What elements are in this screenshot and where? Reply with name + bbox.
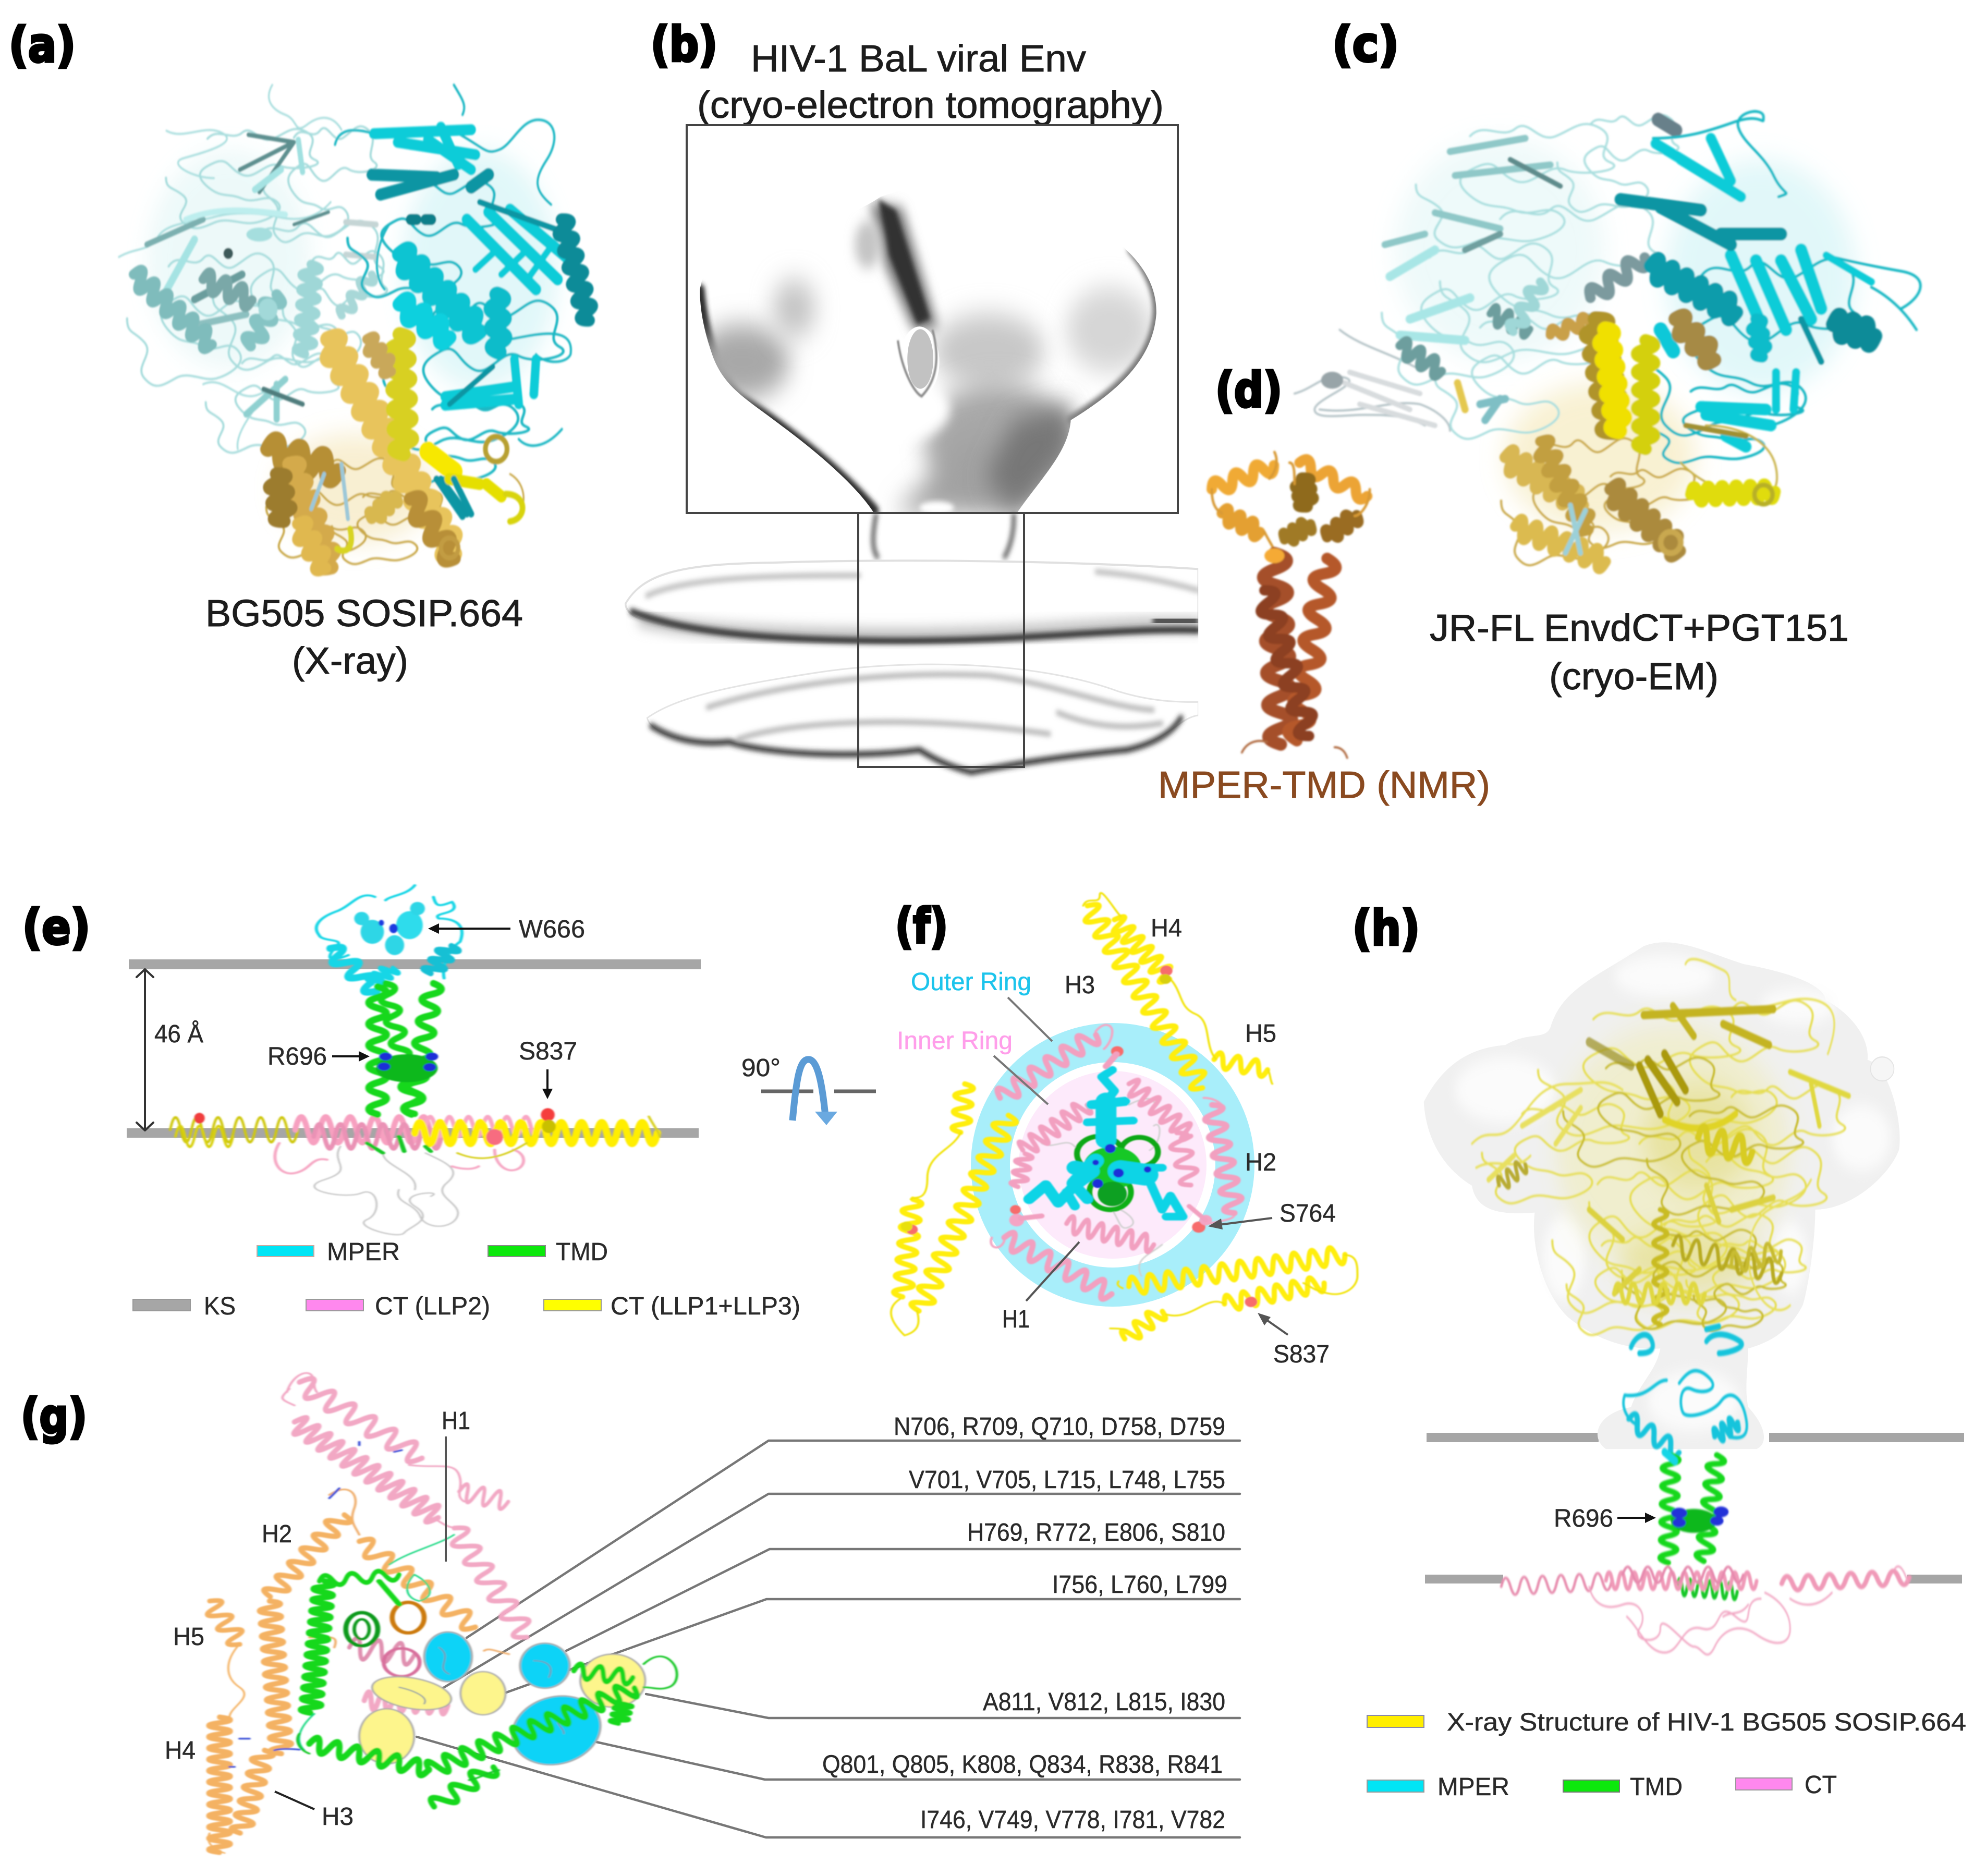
residue labels: I756, L760, L799: [1052, 1571, 1227, 1599]
dimension arrow 46 Å: [137, 969, 153, 1130]
outer ring: [971, 1023, 1254, 1307]
W666 callout: [428, 916, 585, 943]
panel label c: (c): [1332, 17, 1399, 72]
legend h: MPER: [1437, 1773, 1509, 1801]
helix labels f: [1002, 915, 1276, 1333]
W666 callout: W666: [519, 916, 585, 943]
caption c: [1430, 607, 1849, 698]
panel: c - cryo-EM structure: [1295, 17, 1920, 698]
title b: [697, 38, 1164, 126]
helix labels f: H5: [1245, 1020, 1276, 1047]
caption c: (cryo-EM): [1549, 656, 1719, 698]
outer ring label: Outer Ring: [911, 968, 1031, 996]
H1 pointer and helix labels g: H1: [442, 1407, 470, 1435]
R696 callout h: [1554, 1505, 1656, 1532]
inner ring: [1019, 1071, 1207, 1259]
MPER TMD CT ribbons: [1501, 1326, 1909, 1654]
helix labels f: H2: [1245, 1149, 1276, 1176]
panel label h: (h): [1353, 900, 1420, 956]
inner ring label: [897, 1027, 1048, 1104]
panel: a - X-ray structure: [9, 17, 595, 682]
residue labels: V701, V705, L715, L748, L755: [909, 1466, 1225, 1494]
S837 callout: [1258, 1313, 1330, 1368]
leader lines: [417, 1441, 1240, 1837]
helix labels f: H4: [1151, 915, 1182, 942]
residue labels: H769, R772, E806, S810: [967, 1519, 1225, 1546]
legend e: TMD: [556, 1238, 608, 1266]
ribbon structure top view: [891, 893, 1357, 1345]
helix labels f: H1: [1002, 1306, 1030, 1333]
rotation symbol 90°: 90°: [741, 1054, 781, 1082]
box: ectodomain: [687, 125, 1178, 513]
H1 pointer and helix labels g: H2: [262, 1520, 292, 1548]
R696 callout: R696: [267, 1043, 327, 1070]
panel label f: (f): [895, 898, 948, 954]
panel: e - MPER-TMD-CT model side view: [22, 885, 800, 1320]
stem: [873, 513, 1014, 558]
legend e: CT (LLP2): [375, 1293, 490, 1320]
legend h: X-ray Structure of HIV-1 BG505 SOSIP.664: [1447, 1709, 1966, 1736]
residue labels: Q801, Q805, K808, Q834, R838, R841: [822, 1751, 1223, 1778]
panel label e: (e): [22, 899, 90, 955]
S764 callout: S764: [1280, 1200, 1336, 1227]
outer ring label: [911, 968, 1052, 1041]
legend e: [133, 1238, 800, 1320]
legend e: CT (LLP1+LLP3): [611, 1293, 800, 1320]
panel: f - top view: [891, 893, 1357, 1368]
gap between rings: [1010, 1062, 1215, 1268]
legend h: TMD: [1630, 1773, 1683, 1801]
panel label d: (d): [1215, 362, 1282, 418]
viral spike density: [700, 195, 1156, 512]
membrane boundary bottom: [127, 1128, 699, 1138]
legend e: KS: [204, 1293, 236, 1320]
caption a: [205, 593, 523, 682]
H1 pointer and helix labels g: H5: [173, 1623, 204, 1651]
S764 callout: [1208, 1200, 1336, 1229]
transparent density envelope: [1424, 942, 1900, 1449]
box: membrane region: [858, 513, 1024, 767]
S837 callout: [519, 1038, 577, 1099]
panel label g: (g): [21, 1388, 87, 1444]
legend e: MPER: [327, 1238, 400, 1266]
model in density: [1424, 942, 1909, 1654]
H1 pointer and helix labels g: [165, 1407, 470, 1831]
membrane bars h: [1425, 1433, 1964, 1583]
ribbon structure BG505 SOSIP.664: [119, 85, 595, 573]
membrane boundary top: [129, 959, 701, 969]
label 46 Å: 46 Å: [154, 1020, 203, 1048]
residue labels: N706, R709, Q710, D758, D759: [894, 1413, 1225, 1441]
ribbon structure: [170, 885, 660, 1235]
panel: b - cryo-electron tomography map: [626, 17, 1198, 772]
R696 callout: [267, 1043, 370, 1070]
residue labels: I746, V749, V778, I781, V782: [920, 1806, 1225, 1834]
panel: g - residue interaction map: [21, 1373, 1240, 1853]
caption a: BG505 SOSIP.664: [205, 593, 523, 635]
title b: (cryo-electron tomography): [697, 84, 1164, 126]
viral membrane outer leaflet: [626, 561, 1198, 772]
rotation symbol 90°: [741, 1054, 876, 1125]
H1 pointer and helix labels g: H3: [322, 1803, 354, 1831]
helix labels f: H3: [1065, 971, 1095, 999]
panel label a: (a): [9, 17, 76, 73]
R696 callout h: R696: [1554, 1505, 1613, 1532]
panel label b: (b): [651, 17, 717, 72]
inner ring label: Inner Ring: [897, 1027, 1013, 1055]
title b: HIV-1 BaL viral Env: [751, 38, 1086, 80]
ribbon structure g: [200, 1373, 677, 1853]
legend h: CT: [1805, 1771, 1837, 1799]
caption c: JR-FL EnvdCT+PGT151: [1430, 607, 1849, 649]
density map: [626, 149, 1198, 772]
legend h: [1367, 1709, 1966, 1801]
panel: d - NMR structure: [1158, 362, 1490, 806]
residue labels: [822, 1413, 1227, 1834]
S837 callout: S837: [519, 1038, 577, 1065]
ribbon structure MPER-TMD: [1210, 452, 1370, 758]
S837 callout: S837: [1273, 1341, 1330, 1368]
panel: h - fit into density: [1353, 900, 1966, 1801]
ribbon structure JR-FL EnvdCT: [1295, 112, 1920, 570]
residue labels: A811, V812, L815, I830: [983, 1688, 1225, 1716]
H1 pointer and helix labels g: H4: [165, 1737, 196, 1764]
yellow X-ray ribbons: [1472, 959, 1849, 1335]
caption d: MPER-TMD (NMR): [1158, 764, 1490, 806]
caption a: (X-ray): [292, 640, 408, 682]
